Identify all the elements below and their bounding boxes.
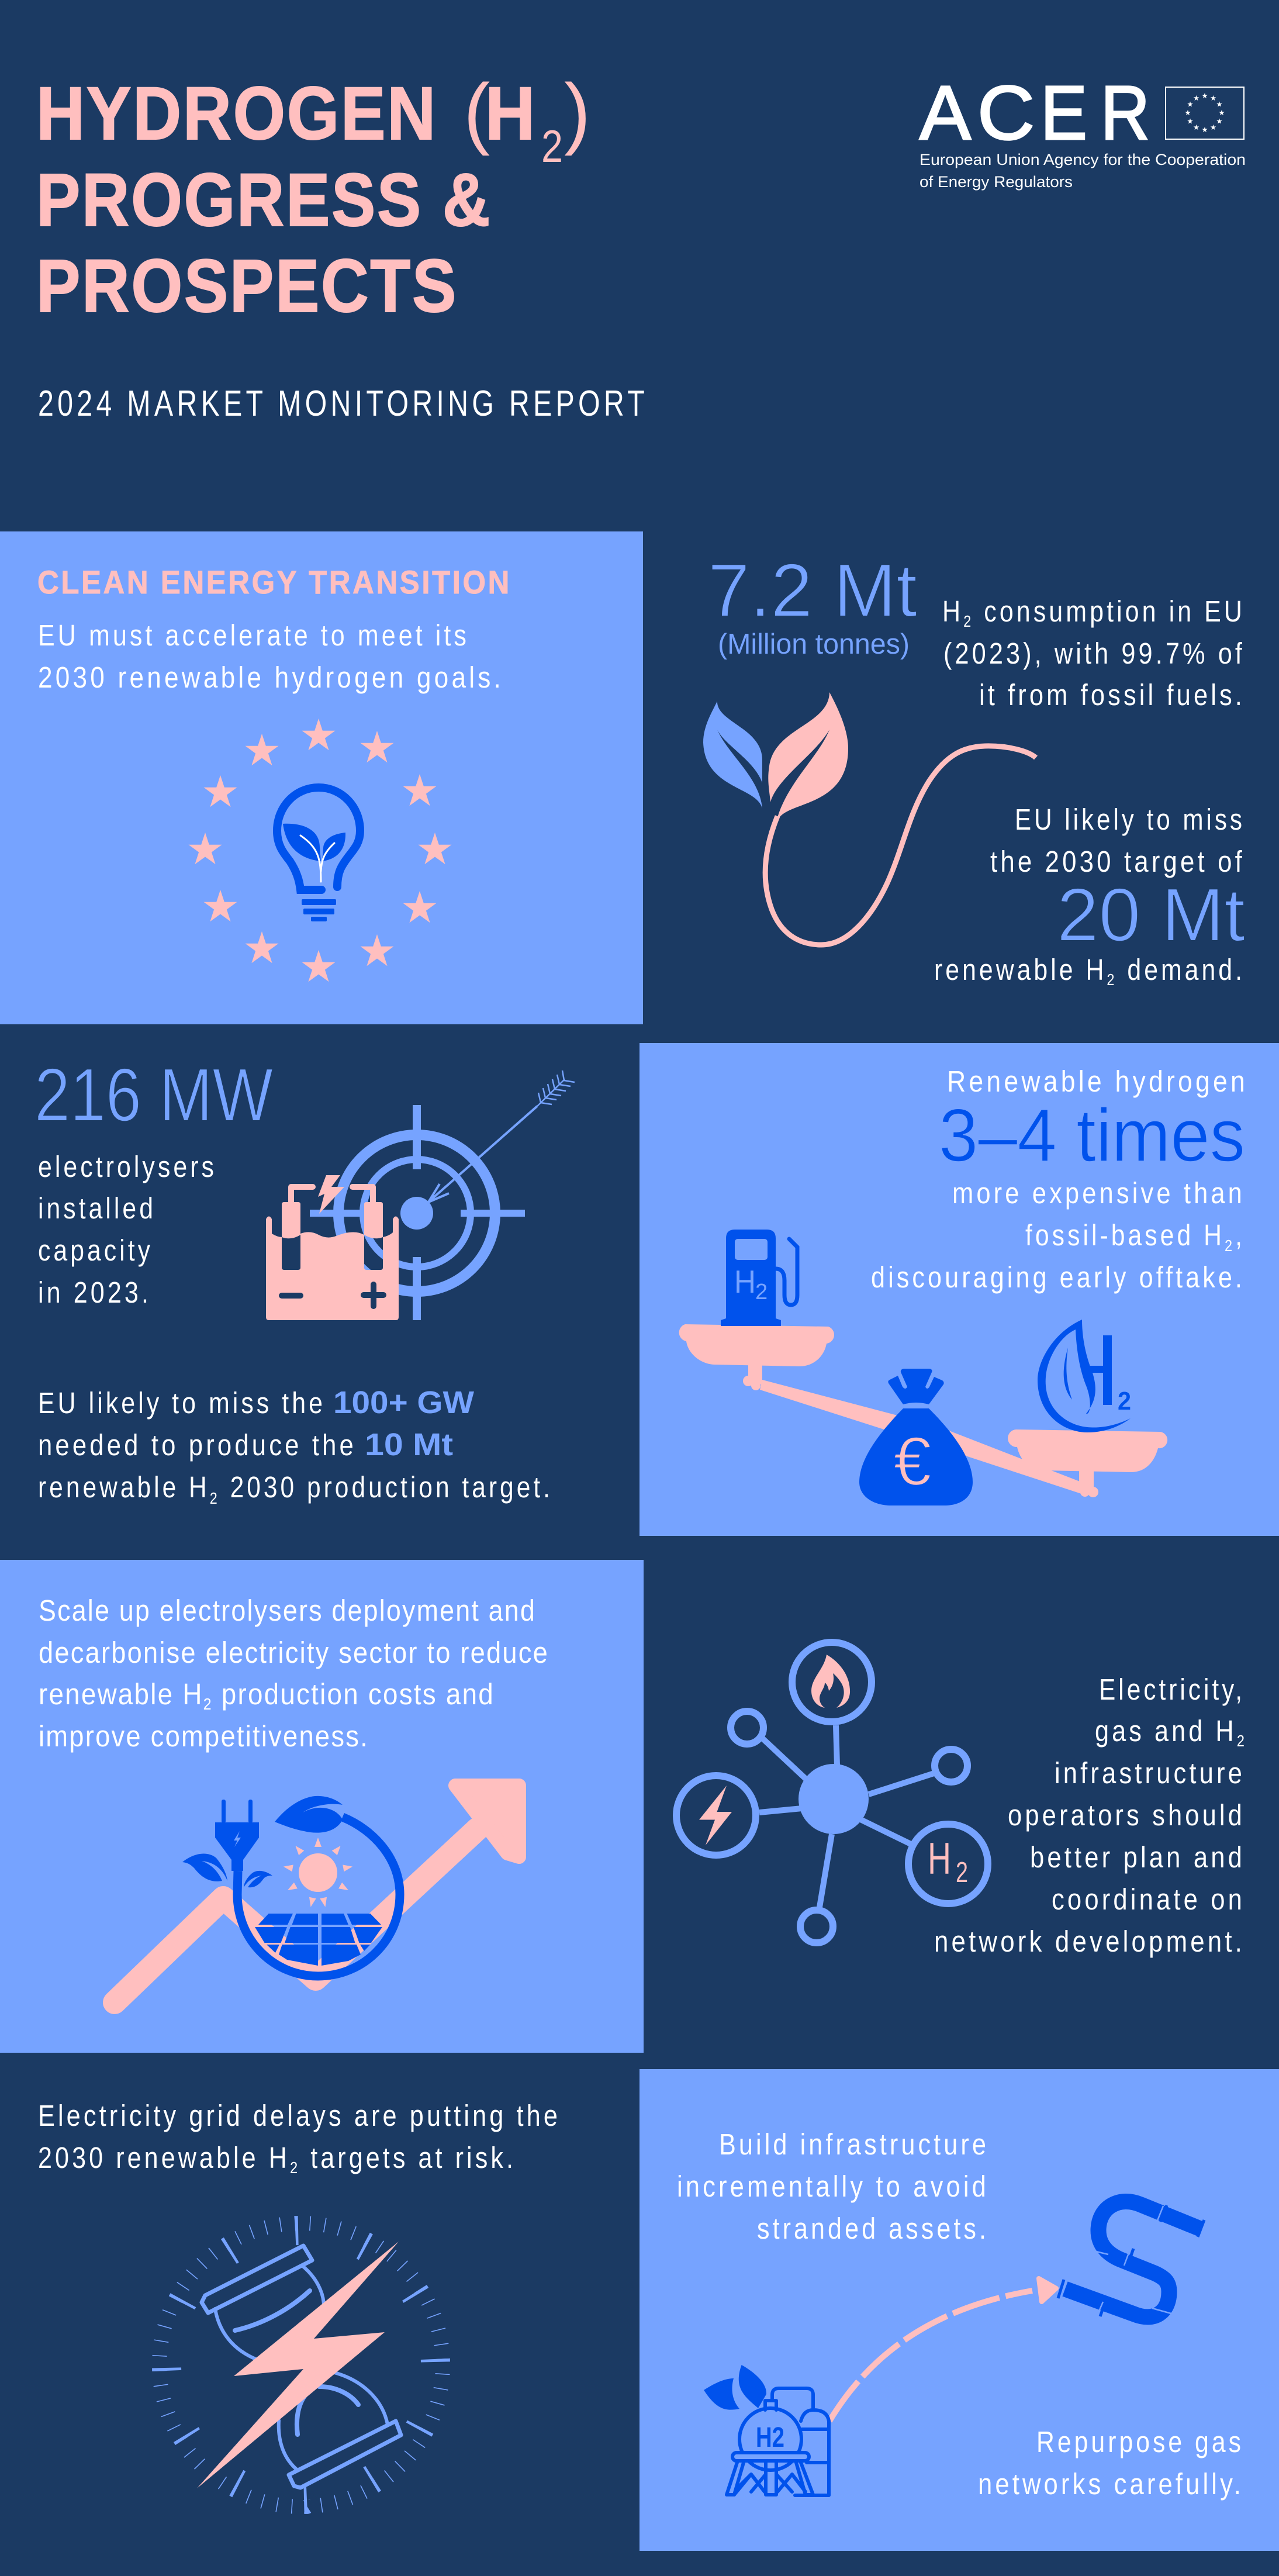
panel: scale up electrolysers [0,1560,644,2053]
text: 100+ GW needed: 100+ GW [333,1385,474,1420]
text: installed capacity: capacity [38,1234,153,1267]
stat: 20 Mt: 20 Mt [1057,873,1245,957]
icon: hydrogen storage tank: H2 [756,2422,784,2453]
logo: ACER: R [1101,70,1150,156]
icon: green hydrogen leaf [1038,1320,1131,1432]
text: grid delays: 2 [290,2159,300,2177]
text: build infrastructure [677,2128,989,2245]
text: operators should coordinate: 2 [1237,1732,1247,1750]
icon: hydrogen fuel pump: H [734,1263,756,1300]
text: grid delays: Electricity grid delays are putting the [38,2099,561,2132]
text: operators should coordinate: Electricity, [1099,1673,1245,1706]
icon: gas flame [811,1655,850,1708]
logo: ACER: A [920,70,972,156]
text: scale up: decarbonise electricity sector to reduce [39,1636,549,1669]
text: accelerate goals: EU must accelerate to meet its [38,619,469,652]
text: more expensive: , [1235,1218,1245,1252]
chart: rising arrow [115,1786,519,2002]
icon: euro money bag: € [893,1423,932,1500]
text: build infrastructure: incrementally to avoid [677,2170,989,2203]
text: installed capacity: in 2023. [38,1276,151,1309]
icon: plug cord with leaves [182,1796,400,1976]
text: H2 consumption: H [942,595,967,628]
text: scale up: 2 [203,1695,213,1713]
text: H2 consumption: 2 [963,612,974,630]
logo: ACER: C [977,70,1035,156]
panel: electrolysers [34,1053,575,1507]
text: accelerate goals [38,619,504,694]
icon: H2 label: H [928,1834,951,1884]
stat: 216 MW: 216 MW [34,1053,273,1137]
icon: hydrogen fuel pump: 2 [755,1280,768,1304]
text: 100+ GW needed: renewable H [38,1470,244,1504]
text: build infrastructure: stranded assets. [757,2212,989,2245]
panel: consumption and demand [703,548,1245,989]
stat: 7.2 Mt: 7.2 Mt [708,548,917,633]
title: PROGRESS & [36,158,492,242]
icon: hydrogen fuel pump [721,1230,797,1326]
text: accelerate goals: 2030 renewable hydrogen goals. [38,661,504,694]
title: HYDROGEN [36,72,437,156]
text: operators should coordinate: gas and H [1095,1714,1263,1748]
title [36,67,590,328]
text: 100+ GW needed: EU likely to miss the [38,1386,326,1420]
icon: light bulb with leaves [277,788,360,921]
text: installed capacity: electrolysers [38,1150,217,1183]
text: renewable demand: 2 [1107,971,1117,989]
text: repurpose gas networks: Repurpose gas [1036,2425,1244,2458]
icon: network hub [676,1642,988,1943]
text: operators should coordinate: better plan and [1030,1841,1245,1874]
icon: lightning bolt [197,2242,399,2488]
text: renewable demand: demand. [1117,953,1245,986]
stat: 3-4 times: 3–4 times [939,1094,1245,1177]
logo: ACER [920,70,1246,191]
icon: solar panel [255,1914,382,1966]
text: operators should coordinate: operators should [1008,1798,1245,1832]
text: scale up: Scale up electrolysers deployment and [39,1594,536,1627]
text: scale up: improve competitiveness. [39,1719,369,1753]
title: H [485,72,537,156]
text: installed capacity: installed [38,1192,156,1225]
text: grid delays [38,2099,561,2177]
text: likely to miss target [990,803,1245,878]
subtitle: 2024 MARKET MONITORING REPORT [38,384,648,424]
label: million tonnes: (Million tonnes) [718,629,910,660]
arrow: dashed curve [829,2278,1056,2421]
logo: ACER: European Union Agency for the Cooperation [920,151,1246,168]
title: 2 [541,120,563,172]
icon: sun [283,1838,353,1908]
text: 100+ GW needed: 2030 production target. [220,1470,553,1504]
icon: hydrogen storage tank [704,2365,829,2495]
text: installed capacity [38,1150,217,1309]
icon: euro money bag [859,1369,973,1505]
icon: EU stars ring [188,719,451,982]
panel: build incrementally [640,2069,1279,2551]
icon: target with arrow [310,1071,575,1320]
panel: grid delays [38,2099,561,2513]
panel: cost of renewable hydrogen [640,1043,1279,1536]
text: 100+ GW needed: needed to produce the [38,1428,357,1462]
icon: balance scale [679,1324,1167,1497]
icon: pipeline [1058,2201,1204,2317]
icon: hourglass [202,2246,401,2488]
text: operators should coordinate: infrastructure [1055,1756,1245,1790]
logo: ACER: E [1041,70,1087,156]
text: repurpose gas networks [978,2425,1244,2501]
panel: infrastructure coordination [676,1642,1247,1958]
text: more expensive: fossil-based H [1025,1218,1263,1252]
title: ( [464,67,490,156]
logo: ACER: of Energy Regulators [920,173,1073,191]
panel: clean energy transition [0,531,643,1024]
text: build infrastructure: Build infrastructure [719,2128,989,2161]
title: ) [564,67,590,156]
text: grid delays: targets at risk. [300,2141,516,2174]
icon: sprout with curved stem [703,692,1036,945]
title: PROSPECTS [36,244,458,328]
heading: clean energy transition: CLEAN ENERGY TRANSITION [37,564,511,600]
text: operators should coordinate [934,1673,1247,1958]
text: grid delays: 2030 renewable H [38,2141,336,2174]
text: scale up [39,1594,549,1753]
text: scale up: renewable H [39,1677,222,1711]
text: 100+ GW needed [38,1385,553,1507]
text: renewable demand: renewable H [934,953,1140,986]
text: operators should coordinate: coordinate on [1052,1883,1245,1916]
icon: clock ticks [153,2217,449,2513]
text: 100+ GW needed: 10 Mt [365,1427,453,1462]
text: more expensive: 2 [1225,1237,1235,1255]
icon: green hydrogen leaf: 2 [1118,1387,1131,1415]
icon: H2 label: 2 [956,1857,968,1888]
text: H2 consumption [942,595,1245,712]
text: 100+ GW needed: 2 [210,1489,220,1507]
text: likely to miss target: the 2030 target of [990,845,1245,878]
text: more expensive [871,1176,1245,1294]
text: scale up: production costs and [213,1677,495,1711]
icon: electrolyser battery [266,1175,399,1320]
icon: electricity bolt [699,1786,732,1845]
